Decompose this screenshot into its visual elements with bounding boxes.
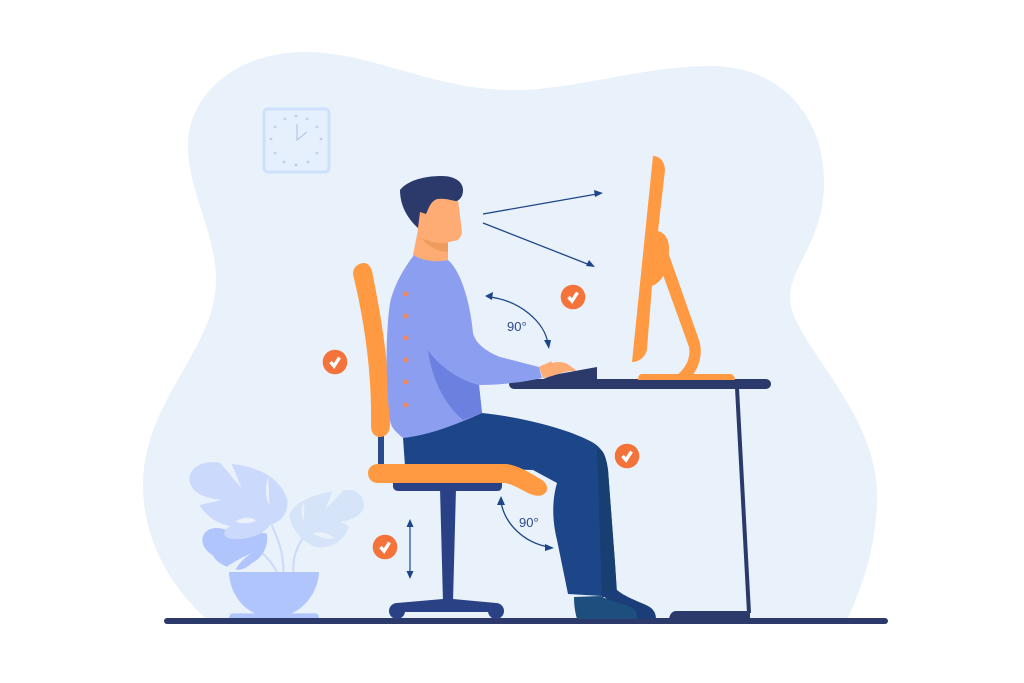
chair height arrow xyxy=(406,519,414,579)
chair xyxy=(353,263,504,619)
background blob xyxy=(143,52,877,618)
sweater xyxy=(387,255,542,438)
elbow angle label: 90° xyxy=(507,319,527,334)
check badge: back xyxy=(323,350,347,374)
monitor stand xyxy=(662,252,701,376)
seat cushion xyxy=(368,464,547,496)
shoe toe xyxy=(600,590,656,619)
keyboard xyxy=(541,367,597,380)
leaf: large notches xyxy=(236,477,269,523)
hair xyxy=(400,176,463,228)
spine dots xyxy=(404,292,408,408)
computer monitor xyxy=(632,156,735,380)
desk leg xyxy=(735,388,751,613)
monitor screen xyxy=(632,156,669,362)
monitor base xyxy=(638,374,735,380)
potted plant xyxy=(189,462,364,619)
hand xyxy=(539,361,577,378)
floor line xyxy=(164,618,888,624)
leaf: right xyxy=(289,490,364,547)
face xyxy=(416,198,462,243)
check badge: chair height xyxy=(373,535,397,559)
check badge: monitor xyxy=(561,285,585,309)
chair backrest xyxy=(353,263,390,437)
knee angle arrow xyxy=(497,496,554,551)
desk top xyxy=(509,379,771,389)
wall clock xyxy=(264,109,329,172)
leaf: lower left xyxy=(202,528,267,570)
chair seat support xyxy=(393,480,502,491)
pot xyxy=(229,572,319,619)
shoe xyxy=(574,596,637,619)
check badge: knee xyxy=(615,444,639,468)
stems xyxy=(261,525,303,573)
trousers shade xyxy=(597,449,617,597)
sight line lower arrow xyxy=(483,223,595,267)
chair column xyxy=(440,488,456,602)
sight line upper arrow xyxy=(483,190,603,214)
neck xyxy=(413,225,448,263)
sweater arm shade xyxy=(428,350,482,420)
neck shadow xyxy=(421,238,448,252)
desk foot xyxy=(669,611,750,620)
chair backrest post xyxy=(378,432,384,466)
knee angle label: 90° xyxy=(519,515,539,530)
person xyxy=(368,176,656,619)
leaf: large xyxy=(189,462,287,539)
elbow angle arrow xyxy=(485,292,551,349)
leaf: right notches xyxy=(302,502,334,539)
chair base xyxy=(389,599,504,619)
trousers xyxy=(403,413,617,596)
desk xyxy=(509,379,771,620)
